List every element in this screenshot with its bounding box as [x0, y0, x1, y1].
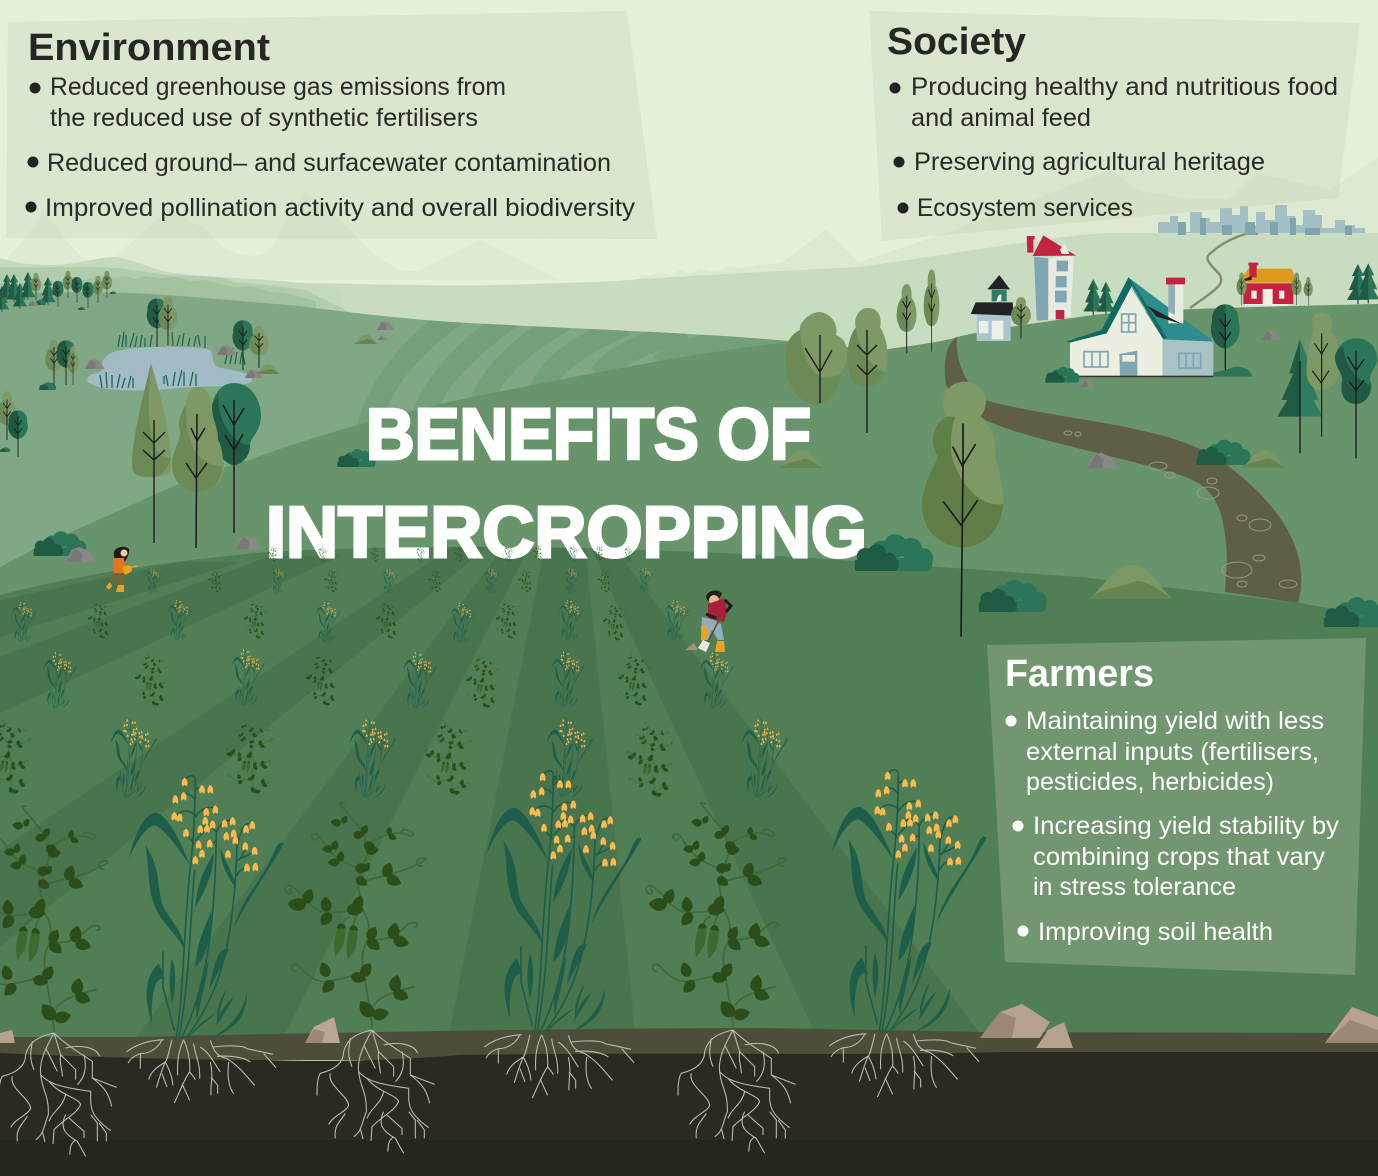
bush on right slope	[979, 580, 1047, 612]
row six	[268, 544, 634, 563]
pines near house	[1083, 263, 1378, 315]
panel: farmers	[987, 638, 1366, 975]
curved field stripes	[357, 320, 788, 425]
bushes, mounds and rocks on the hills	[33, 449, 823, 562]
bullet list: farmers: Maintaining yield with less	[1026, 707, 1324, 735]
farmer watering	[106, 547, 138, 592]
bullet list: society: and animal feed	[911, 104, 1091, 132]
title line 1: BENEFITS OF	[366, 395, 811, 475]
bullet list: farmers: pesticides, herbicides)	[1026, 768, 1274, 796]
bush at right edge	[1324, 597, 1378, 627]
pond with reeds	[87, 332, 252, 390]
small black-roofed house	[971, 275, 1014, 341]
oat plant two	[484, 771, 642, 1098]
darker bottom soil strip	[0, 1140, 1378, 1176]
tall olive tree	[922, 382, 1003, 637]
pond-side rocks	[85, 321, 395, 378]
village	[897, 235, 1378, 468]
mid-distance light band	[230, 233, 1378, 420]
mid-distance trees	[897, 269, 1031, 353]
field rays	[0, 545, 985, 1040]
bullet list: society: Preserving agricultural heritage	[914, 148, 1265, 176]
bullet list: farmers: external inputs (fertilisers,	[1026, 738, 1319, 766]
distant mountains	[0, 157, 1378, 280]
rocks and bushes along the road	[1045, 330, 1286, 468]
city skyline	[1158, 205, 1365, 235]
bullet list: environment: Reduced ground– and surfacewater contamination	[47, 149, 611, 177]
title	[266, 395, 867, 573]
winding road	[945, 233, 1301, 603]
right-side trees	[1277, 312, 1377, 458]
row four	[12, 600, 689, 643]
foreground hill objects	[855, 382, 1378, 637]
left tall trees	[132, 363, 261, 548]
foreground rocks	[0, 1004, 1378, 1048]
bullet list: environment	[26, 73, 636, 222]
pond-side trees	[0, 296, 269, 457]
main white house	[1066, 277, 1214, 377]
oat plant one	[126, 776, 284, 1103]
bullet list: society: Ecosystem services	[917, 194, 1133, 222]
panel: society	[869, 11, 1360, 241]
soil topsoil band	[0, 1028, 1378, 1060]
bullet list: society: Producing healthy and nutritious food	[911, 73, 1338, 101]
far pale hills	[0, 257, 350, 340]
red farmhouse	[1238, 263, 1297, 306]
bullet list: society	[890, 73, 1338, 222]
bullet list: farmers: combining crops that vary	[1033, 843, 1326, 871]
bullet list: environment: Improved pollination activity and overall biodiversity	[45, 194, 636, 222]
heading: environment: Environment	[28, 27, 270, 69]
bullet list: environment: Reduced greenhouse gas emissions from	[50, 73, 506, 101]
olive trees mid-centre	[786, 308, 888, 433]
row three	[43, 649, 734, 710]
title line 2: INTERCROPPING	[266, 493, 867, 573]
panel: environment	[6, 11, 657, 239]
mound on right slope	[1088, 565, 1174, 599]
bush by title	[855, 534, 933, 571]
trees around the farmhouse	[1211, 272, 1313, 377]
bullet list: farmers	[1006, 707, 1340, 946]
farmer digging	[685, 591, 731, 652]
oat plant three	[829, 770, 987, 1097]
pea plant three	[646, 803, 796, 1153]
pea plant one	[0, 806, 117, 1156]
bullet list: farmers: Increasing yield stability by	[1033, 812, 1340, 840]
far-left tree line	[0, 271, 116, 312]
middle hill	[0, 304, 1378, 700]
rolling light hill	[0, 292, 800, 600]
row five	[146, 567, 653, 593]
row two	[0, 719, 788, 800]
bullet list: farmers: in stress tolerance	[1033, 873, 1236, 901]
tower house	[1027, 235, 1076, 321]
pea plant two	[285, 803, 435, 1153]
main crop row with roots	[0, 770, 987, 1156]
heading: farmers: Farmers	[1005, 653, 1154, 695]
dark soil	[0, 1052, 1378, 1176]
heading: society: Society	[887, 21, 1026, 63]
crop rows, far to middle	[0, 544, 788, 800]
bullet list: environment: the reduced use of synthetic fertilisers	[50, 104, 478, 132]
bullet list: farmers: Improving soil health	[1038, 918, 1273, 946]
bottom field	[0, 547, 1378, 1060]
